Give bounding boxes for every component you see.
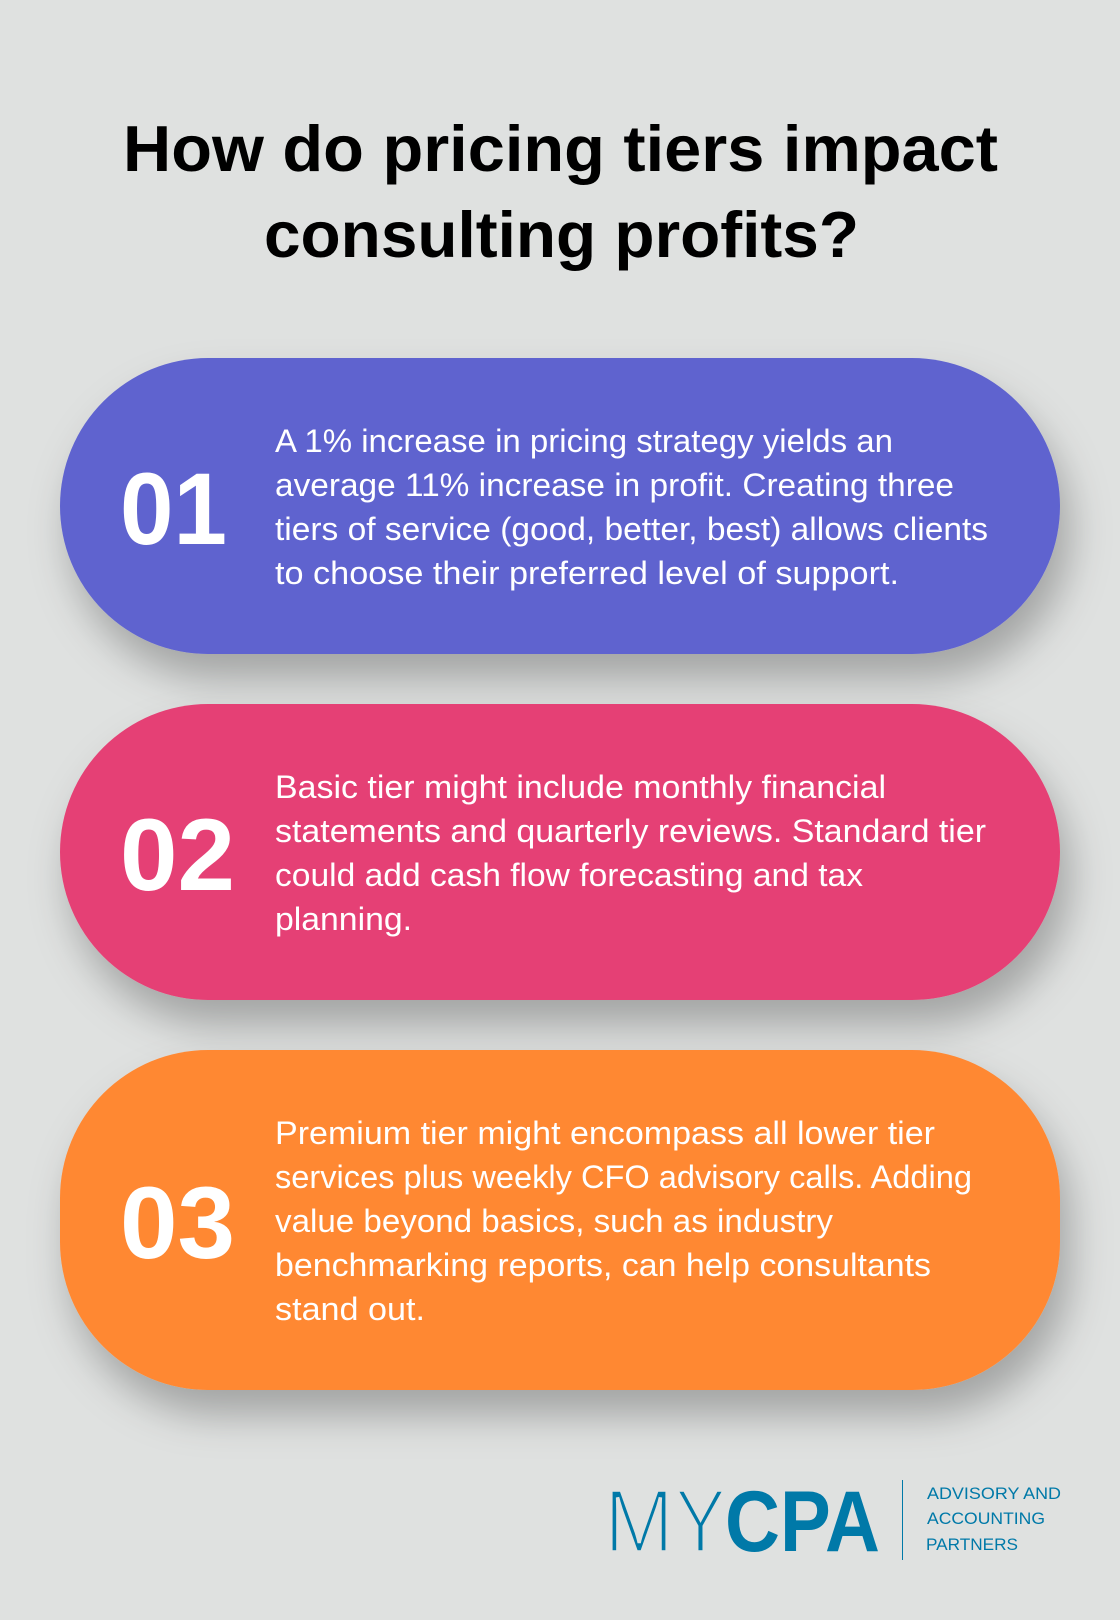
panel: step 01	[60, 358, 1060, 654]
panel background: pink pill	[60, 704, 1060, 1000]
logo tagline	[926, 1484, 1061, 1554]
logo tagline: PARTNERS	[926, 1535, 1018, 1554]
text block: step 01: tiers of service (good, better, best) allows clients	[275, 511, 988, 547]
text block: step 02	[275, 769, 986, 937]
step number 01: 01	[120, 452, 227, 566]
panel: step 03	[60, 1050, 1060, 1390]
step number 02: 02	[120, 798, 235, 912]
text block: step 03: benchmarking reports, can help consultants	[275, 1247, 931, 1283]
logo wordmark: CPA	[725, 1474, 880, 1570]
logo tagline: ACCOUNTING	[927, 1509, 1045, 1528]
text block: step 02: Basic tier might include monthly financial	[275, 769, 886, 805]
text block: step 01: A 1% increase in pricing strategy yields an	[275, 423, 893, 459]
title: consulting profits?	[264, 198, 859, 271]
panel background: orange pill	[60, 1050, 1060, 1390]
title: How do pricing tiers impact	[123, 112, 998, 185]
title	[123, 112, 998, 271]
logo wordmark: M	[604, 1472, 674, 1572]
text block: step 01: average 11% increase in profit. Creating three	[275, 467, 954, 503]
logo wordmark: Y	[675, 1472, 726, 1572]
text block: step 03	[275, 1115, 972, 1327]
text block: step 03: services plus weekly CFO advisory calls. Adding	[275, 1159, 972, 1195]
panel background: blue pill	[60, 358, 1060, 654]
text block: step 02: could add cash flow forecasting and tax	[275, 857, 863, 893]
text block: step 03: value beyond basics, such as industry	[275, 1203, 833, 1239]
logo: MYCPA	[604, 1472, 1061, 1572]
logo wordmark	[604, 1472, 880, 1572]
text block: step 01: to choose their preferred level of support.	[275, 555, 899, 591]
panel: step 02	[60, 704, 1060, 1000]
text block: step 02: planning.	[275, 901, 412, 937]
text block: step 01	[275, 423, 988, 591]
text block: step 02: statements and quarterly reviews. Standard tier	[275, 813, 986, 849]
text block: step 03: stand out.	[275, 1291, 425, 1327]
step number 03: 03	[120, 1166, 235, 1280]
text block: step 03: Premium tier might encompass all lower tier	[275, 1115, 935, 1151]
logo tagline: ADVISORY AND	[927, 1484, 1061, 1503]
